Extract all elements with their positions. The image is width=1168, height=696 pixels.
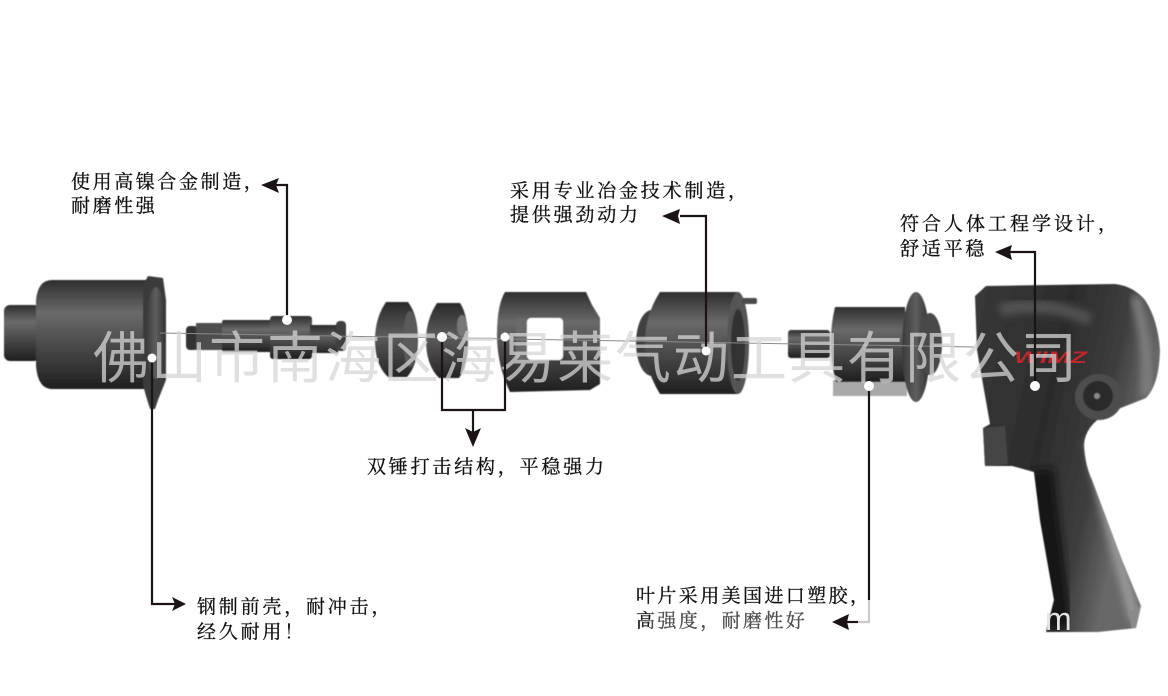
leader: vanes <box>832 381 874 630</box>
label: tool body <box>900 213 1120 260</box>
part: cylinder <box>636 292 757 394</box>
label: vanes <box>636 585 871 632</box>
part: rotor with vanes <box>788 292 942 402</box>
watermark company name: 佛山市南海区海易莱气动工具有限公司 <box>93 327 1079 390</box>
label: housing <box>197 596 393 643</box>
label: cylinder <box>510 180 750 226</box>
label: housing: 钢制前壳，耐冲击， <box>197 596 393 618</box>
axis line <box>160 333 975 347</box>
leader: anvil <box>261 178 292 325</box>
exploded diagram of impact wrench <box>3 172 1161 640</box>
label: cylinder: 提供强劲动力 <box>510 204 641 226</box>
faint web watermark: m <box>1045 601 1072 637</box>
label: anvil: 使用高镍合金制造， <box>71 171 265 193</box>
label: cylinder: 采用专业冶金技术制造， <box>510 180 750 202</box>
label: vanes: 高强度，耐磨性好 <box>636 610 807 632</box>
label: tool body: 符合人体工程学设计， <box>900 213 1120 235</box>
leader: tool body <box>995 245 1040 391</box>
label: tool body: 舒适平稳 <box>900 238 987 260</box>
part: anvil shaft <box>186 316 346 359</box>
part: hammer cage <box>497 292 600 392</box>
label: housing: 经久耐用！ <box>197 621 306 643</box>
leader: housing <box>148 354 186 611</box>
label: anvil <box>71 171 265 217</box>
part: small ring <box>375 302 418 377</box>
part: front housing <box>4 276 166 409</box>
leader: twin hammer <box>437 332 510 447</box>
label: anvil: 耐磨性强 <box>71 195 157 217</box>
part: tool body with pistol grip <box>975 284 1165 632</box>
leader: cylinder <box>662 209 710 356</box>
part: hammer ring <box>426 303 468 378</box>
label: twin hammer: 双锤打击结构，平稳强力 <box>367 456 607 478</box>
brand mark on tool: WIMZ <box>1014 348 1088 367</box>
label: vanes: 叶片采用美国进口塑胶， <box>636 585 871 607</box>
